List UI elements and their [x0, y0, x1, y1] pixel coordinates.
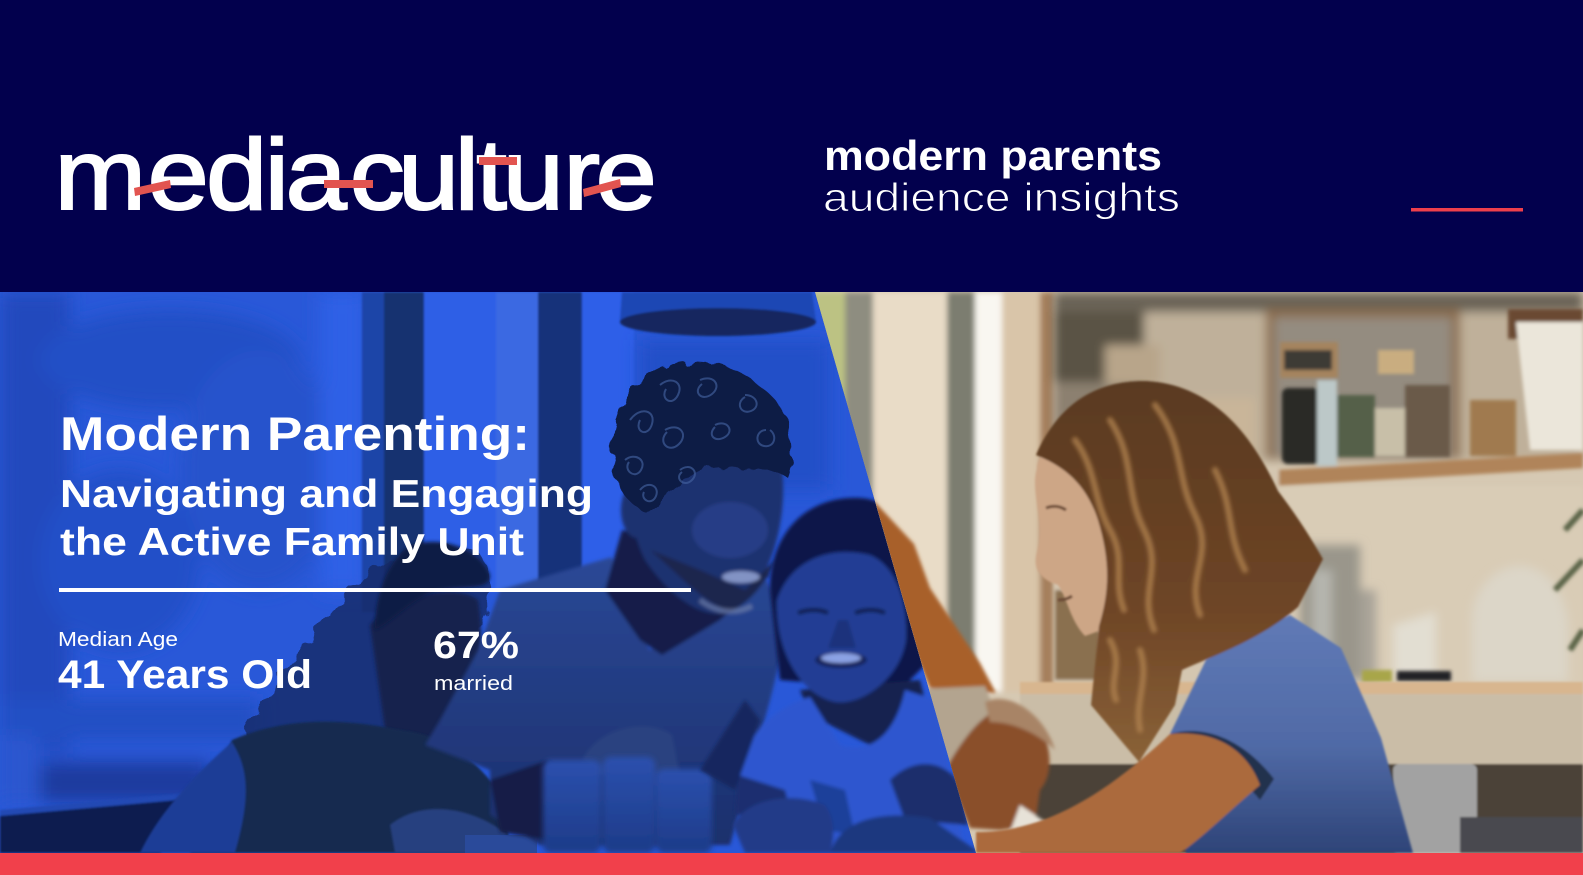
centre girl hair and father's arm	[873, 500, 1055, 832]
subtitle: audience insights	[823, 176, 1180, 220]
counter appliances	[1300, 545, 1568, 682]
red footer band	[0, 853, 1583, 875]
stat: median age: Median Age	[58, 629, 178, 651]
stat: married: married	[434, 673, 513, 695]
centre girl, blue side	[700, 498, 980, 853]
window frames	[810, 292, 1054, 692]
headline: the Active Family Unit	[60, 521, 524, 564]
stat: median age: 41 Years Old	[58, 653, 312, 697]
stat: married: 67%	[433, 625, 519, 667]
logo: mediaculture: mediaculture	[54, 120, 657, 231]
header band	[0, 0, 1583, 292]
logo accent bars	[134, 157, 621, 197]
photo: blue-tinted family side	[0, 292, 980, 853]
headline	[60, 407, 593, 564]
seated woman	[976, 381, 1413, 853]
subtitle	[823, 132, 1180, 220]
father	[425, 362, 794, 845]
bottles	[543, 757, 712, 853]
headline: Modern Parenting:	[60, 407, 530, 460]
photo: natural kitchen side	[810, 292, 1583, 853]
subtitle: modern parents	[824, 132, 1162, 179]
stat: median age	[58, 629, 312, 697]
white divider	[59, 588, 691, 592]
lamp	[620, 292, 816, 336]
kitchen background and shelf	[1054, 292, 1583, 482]
red accent line	[1411, 208, 1523, 212]
headline: Navigating and Engaging	[60, 473, 593, 516]
counter	[1020, 682, 1583, 853]
stat: married	[433, 625, 519, 695]
left child	[140, 542, 537, 853]
